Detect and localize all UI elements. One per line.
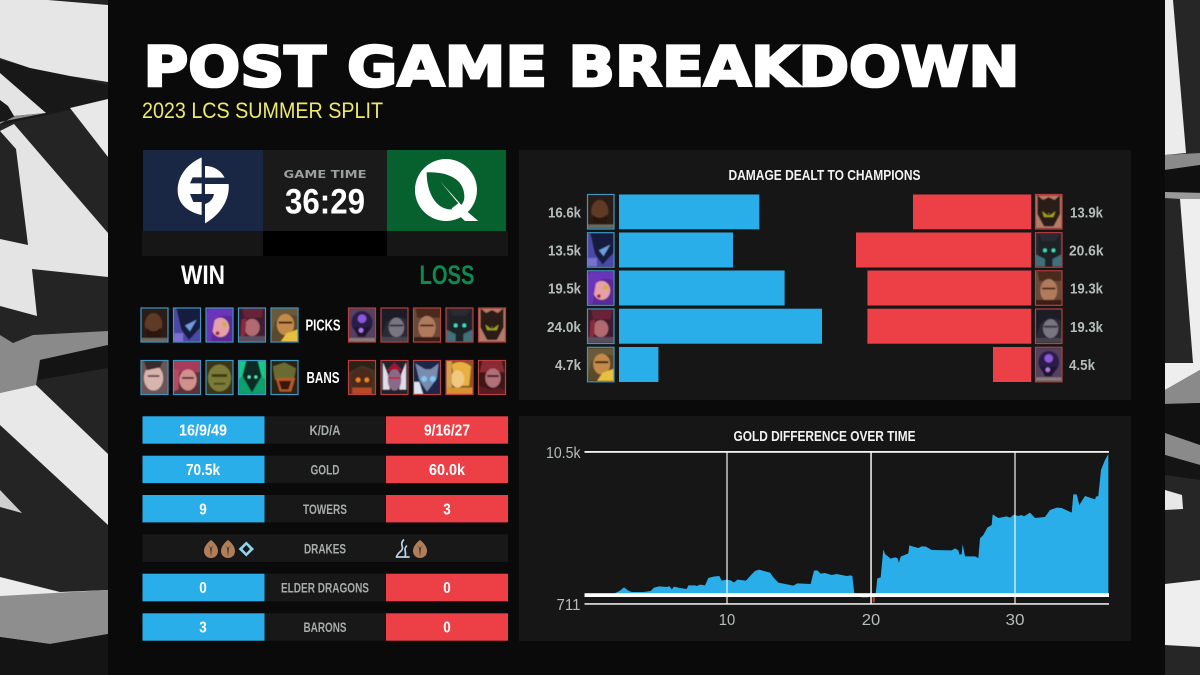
row: elder dragons: 0 [443, 580, 451, 597]
chart heading: DAMAGE DEALT TO CHAMPIONS [728, 167, 920, 184]
blue damage values: 4.7k [555, 357, 582, 374]
icon: cloud drake [396, 540, 409, 557]
row: K/D/A: 16/9/49 [179, 422, 227, 440]
red champion portraits [1036, 194, 1062, 382]
blue damage bars [619, 194, 822, 382]
row: K/D/A [142, 416, 508, 444]
blue damage values: 13.5k [548, 242, 582, 260]
red damage bars [856, 194, 1031, 382]
row: drakes [142, 534, 508, 562]
title: POST GAME BREAKDOWN [144, 35, 1020, 99]
bans label: BANS [306, 370, 340, 387]
game time label: GAME TIME [284, 168, 366, 181]
row: towers: 3 [443, 502, 451, 518]
row: K/D/A: K/D/A [310, 423, 341, 438]
subtitle: 2023 LCS SUMMER SPLIT [142, 98, 383, 123]
row: elder dragons [142, 574, 508, 601]
blue damage values: 16.6k [548, 204, 582, 222]
row: barons: BARONS [304, 620, 346, 635]
game time value: 36:29 [285, 182, 365, 222]
red damage values: 4.5k [1069, 357, 1096, 374]
icon: hextech drake [239, 542, 254, 556]
x axis labels: 10 [719, 612, 735, 629]
row: towers: 9 [199, 502, 207, 518]
y axis labels: 711 [556, 597, 581, 614]
y axis labels: 10.5k [546, 445, 581, 462]
x axis labels [719, 612, 1025, 629]
row: towers [142, 495, 508, 522]
row: barons: 3 [199, 620, 207, 636]
row: gold [142, 456, 508, 483]
right decorative artwork [1165, 0, 1200, 675]
panel: gold difference over time [519, 416, 1131, 641]
left decorative artwork [0, 0, 108, 675]
blue damage values [547, 204, 582, 374]
panel: team stats table [142, 416, 508, 641]
panel: damage dealt to champions [519, 150, 1131, 400]
row: barons [142, 613, 508, 641]
area: gold lead early game [613, 570, 854, 594]
blue damage values: 24.0k [547, 319, 582, 336]
blue damage values: 19.5k [548, 280, 582, 298]
icon: mountain drake [221, 540, 235, 558]
row: towers: TOWERS [303, 502, 347, 517]
result: loss: LOSS [420, 260, 474, 290]
red damage values: 19.3k [1070, 280, 1104, 298]
x axis labels: 30 [1006, 612, 1025, 629]
team logo: FlyQuest [387, 150, 506, 231]
row: elder dragons: 0 [199, 580, 207, 597]
red team bans [348, 360, 506, 394]
panel: team scoreboard [142, 150, 508, 256]
red team picks [348, 308, 506, 342]
row: gold: 60.0k [429, 462, 465, 479]
team logo: Evil Geniuses [143, 150, 263, 231]
blue team picks [141, 308, 298, 342]
picks label: PICKS [306, 318, 340, 334]
row: drakes: DRAKES [304, 542, 346, 556]
axis lines [584, 451, 1109, 605]
row: gold: 70.5k [186, 462, 220, 479]
blue team bans [141, 360, 298, 394]
area: gold lead late game [860, 454, 1108, 602]
row: barons: 0 [443, 620, 451, 636]
red damage values: 20.6k [1069, 242, 1104, 260]
red damage values [1069, 204, 1104, 374]
chart heading: GOLD DIFFERENCE OVER TIME [734, 428, 916, 445]
red damage values: 19.3k [1070, 319, 1104, 336]
icon: mountain drake [204, 540, 218, 558]
row: elder dragons: ELDER DRAGONS [281, 580, 369, 596]
row: K/D/A: 9/16/27 [424, 422, 470, 440]
y axis labels [546, 445, 581, 614]
blue champion portraits [588, 194, 614, 382]
x axis labels: 20 [862, 612, 880, 629]
result: win: WIN [181, 260, 225, 290]
row: gold: GOLD [310, 462, 340, 478]
icon: mountain drake [413, 540, 427, 558]
red damage values: 13.9k [1070, 204, 1104, 222]
